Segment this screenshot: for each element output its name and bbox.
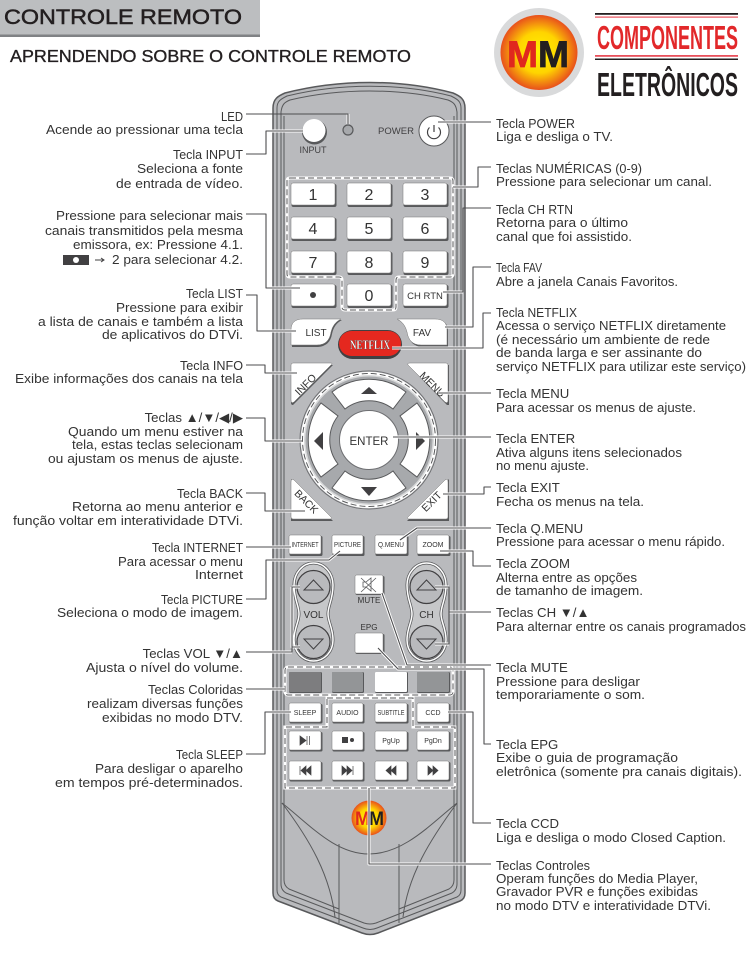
label: ENTER [496, 431, 682, 473]
controls keys group: PgDn [424, 738, 442, 745]
function keys row [289, 535, 450, 556]
function keys row: Q.MENU [378, 542, 404, 549]
controls keys group: CCD [425, 710, 441, 717]
logo: MM badge: M [507, 34, 538, 75]
power button [378, 116, 449, 146]
label: LIST: Pressione para exibir [116, 300, 244, 315]
menu button: MENU [417, 370, 447, 400]
info button [291, 363, 333, 405]
label: POWER: Tecla POWER [496, 116, 575, 131]
label: POWER: Liga e desliga o TV. [496, 129, 613, 144]
label: INPUT [116, 147, 243, 191]
label: INFO [15, 358, 244, 386]
label: VOL [86, 646, 243, 675]
label: CH: Para alternar entre os canais programados [496, 619, 746, 634]
mute button [355, 575, 384, 605]
label: BACK: Tecla BACK [177, 486, 243, 501]
subtitle: APRENDENDO SOBRE O CONTROLE REMOTO [10, 46, 411, 66]
remote body [273, 82, 465, 934]
label: MENU: Para acessar os menus de ajuste. [496, 400, 696, 415]
controls keys group: SLEEP [294, 710, 317, 717]
label: NETFLIX [496, 305, 746, 374]
label: BACK: função voltar em interatividade DTVi. [13, 513, 243, 528]
remote control [273, 82, 465, 934]
label: CH RTN: canal que foi assistido. [496, 229, 632, 244]
label: INPUT: Tecla INPUT [173, 147, 243, 162]
function keys row: PICTURE [334, 542, 361, 549]
exit button: EXIT [420, 489, 445, 514]
label: Q.MENU [496, 521, 725, 549]
label: LIST: de aplicativos do DTVi. [102, 327, 243, 342]
remote mm logo: M [369, 809, 384, 830]
label: INFO: Tecla INFO [180, 358, 243, 373]
label: arrow keys: ou ajustam os menus de ajuste. [48, 451, 243, 466]
label: dot key [45, 208, 244, 267]
label: arrow keys: tela, estas teclas selecionam [72, 437, 243, 452]
info button: INFO [293, 372, 319, 398]
label: LED [46, 109, 244, 137]
label: EPG: eletrônica (somente pra canais digitais). [496, 764, 742, 779]
back button [291, 479, 333, 521]
numeric keypad [287, 178, 453, 310]
colored keys [285, 667, 453, 695]
label: ENTER: Ativa alguns itens selecionados [496, 445, 682, 460]
label: LED: Acende ao pressionar uma tecla [46, 122, 244, 137]
power button: POWER [378, 126, 414, 137]
label: CCD: Liga e desliga o modo Closed Caption. [496, 830, 726, 845]
label: EPG [496, 737, 742, 779]
remote mm logo: M [355, 809, 370, 830]
label: ZOOM [496, 556, 643, 598]
logo: wordmark [595, 13, 738, 103]
label: CH RTN: Tecla CH RTN [496, 202, 573, 217]
label: dot key: 2 para selecionar 4.2. [112, 252, 243, 267]
label: MENU: Tecla MENU [496, 386, 569, 401]
label: CCD [496, 816, 726, 845]
label: NETFLIX: de banda larga e ser assinante do [496, 345, 702, 360]
controls keys group: PgUp [382, 738, 400, 745]
label: ENTER: Tecla ENTER [496, 431, 575, 446]
label: MUTE: temporariamente o som. [496, 687, 645, 702]
d-pad: ENTER [350, 436, 388, 448]
label: numeric keys [496, 161, 712, 189]
label: ENTER: no menu ajuste. [496, 458, 589, 473]
label: SLEEP: Tecla SLEEP [176, 747, 243, 762]
label: EXIT: Tecla EXIT [496, 480, 560, 495]
label: LIST: Tecla LIST [186, 286, 243, 301]
led indicator [343, 125, 353, 135]
numeric keypad: 3 [421, 187, 430, 204]
function keys row: ZOOM [422, 542, 444, 549]
numeric keypad: 9 [421, 255, 430, 272]
label: dot key: Pressione para selecionar mais [56, 208, 243, 223]
numeric keypad: 5 [365, 221, 374, 238]
label: ZOOM: de tamanho de imagem. [496, 583, 643, 598]
channel rocker: CH [419, 610, 434, 621]
label: VOL: Teclas VOL ▼/▲ [143, 646, 243, 661]
label: controls: no modo DTV e interatividade DTVi. [496, 898, 711, 913]
input button [300, 119, 327, 155]
label: BACK [13, 486, 243, 528]
epg button [355, 623, 384, 654]
label: controls: Operam funções do Media Player, [496, 871, 698, 886]
netflix button: NETFLIX [350, 337, 390, 352]
label: LIST [38, 286, 244, 342]
label: FAV: Tecla FAV [496, 260, 542, 275]
label: SLEEP: em tempos pré-determinados. [55, 775, 243, 790]
label: colored keys: Teclas Coloridas [148, 682, 243, 697]
epg button: EPG [361, 623, 377, 632]
label: SLEEP [55, 747, 243, 790]
label: CH RTN [496, 202, 632, 244]
numeric keypad: 8 [365, 255, 374, 272]
label: INTERNET: Internet [195, 567, 243, 582]
label: dot key: canais transmitidos pela mesma [45, 223, 244, 238]
label: INTERNET: Para acessar o menu [118, 554, 243, 569]
label: arrow keys: Teclas ▲/▼/◀/▶ [145, 410, 244, 425]
label: controls [496, 858, 711, 913]
label: INPUT: de entrada de vídeo. [116, 176, 243, 191]
label: LED: LED [221, 109, 243, 124]
title band: CONTROLE REMOTO [4, 5, 242, 29]
label: BACK: Retorna ao menu anterior e [72, 499, 243, 514]
fav button: FAV [413, 328, 431, 339]
mute button: MUTE [358, 596, 380, 605]
label: ZOOM: Tecla ZOOM [496, 556, 570, 571]
label: NETFLIX: serviço NETFLIX para utilizar este serviço) [496, 359, 746, 374]
label: colored keys: exibidas no modo DTV. [102, 710, 243, 725]
label: PICTURE: Tecla PICTURE [161, 592, 243, 607]
numeric keypad: 6 [421, 221, 430, 238]
menu button [408, 363, 449, 405]
label: MUTE: Pressione para desligar [496, 674, 641, 689]
netflix button [338, 330, 402, 359]
label: arrow keys [48, 410, 244, 466]
label: EXIT [496, 480, 644, 509]
label: MUTE [496, 660, 645, 702]
label: controls: Gravador PVR e funções exibidas [496, 884, 698, 899]
label: SLEEP: Para desligar o aparelho [95, 761, 243, 776]
label: POWER [496, 116, 613, 144]
label: arrow keys: Quando um menu estiver na [68, 424, 244, 439]
back button: BACK [292, 488, 320, 516]
label: MUTE: Tecla MUTE [496, 660, 568, 675]
label: NETFLIX: Tecla NETFLIX [496, 305, 577, 320]
channel rocker [407, 563, 446, 661]
label: INFO: Exibe informações dos canais na tela [15, 371, 244, 386]
numeric keypad: 2 [365, 187, 374, 204]
label: Q.MENU: Pressione para acessar o menu rápido. [496, 534, 725, 549]
label: NETFLIX: (é necessário um ambiente de rede [496, 332, 710, 347]
label: NETFLIX: Acessa o serviço NETFLIX diretamente [496, 318, 726, 333]
label: CH RTN: Retorna para o último [496, 215, 628, 230]
controls keys group [285, 698, 455, 788]
label: numeric keys: Pressione para selecionar um canal. [496, 174, 712, 189]
input button: INPUT [300, 145, 327, 155]
title band [0, 0, 260, 37]
volume rocker [294, 563, 333, 661]
label: PICTURE [57, 592, 243, 620]
label: colored keys: realizam diversas funções [87, 696, 243, 711]
controls keys group: SUBTITLE [378, 710, 405, 717]
leader lines [246, 114, 491, 864]
numeric keypad: CH RTN [407, 291, 443, 302]
list button [291, 319, 342, 347]
list button: LIST [305, 328, 327, 339]
volume rocker: VOL [303, 610, 324, 621]
label: colored keys [87, 682, 243, 725]
label: PICTURE: Seleciona o modo de imagem. [57, 605, 243, 620]
remote mm logo [352, 800, 386, 836]
label: CH: Teclas CH ▼/▲ [496, 605, 590, 620]
label: numeric keys: Teclas NUMÉRICAS (0-9) [496, 161, 642, 176]
label: controls: Teclas Controles [496, 858, 590, 873]
label: CCD: Tecla CCD [496, 816, 559, 831]
label: INPUT: Seleciona a fonte [137, 161, 243, 176]
function keys row: INTERNET [292, 542, 319, 549]
label: INTERNET [118, 540, 243, 582]
label: EXIT: Fecha os menus na tela. [496, 494, 644, 509]
logo: MM badge: M [538, 34, 569, 75]
numeric keypad: 4 [309, 221, 318, 238]
label: dot key: emissora, ex: Pressione 4.1. [73, 237, 243, 252]
label: MENU [496, 386, 696, 415]
label: EPG: Tecla EPG [496, 737, 558, 752]
numeric keypad: 0 [365, 288, 374, 305]
label: CH [496, 605, 746, 634]
d-pad [300, 371, 438, 509]
numeric keypad: 7 [309, 255, 318, 272]
exit button [407, 479, 449, 521]
label: LIST: a lista de canais e também a lista [38, 314, 244, 329]
controls keys group: AUDIO [336, 710, 359, 717]
label: Q.MENU: Tecla Q.MENU [496, 521, 583, 536]
logo: MM badge [494, 8, 584, 97]
label: VOL: Ajusta o nível do volume. [86, 660, 243, 675]
label: ZOOM: Alterna entre as opções [496, 570, 637, 585]
numeric keypad: 1 [309, 187, 318, 204]
label: FAV: Abre a janela Canais Favoritos. [496, 274, 678, 289]
fav button [397, 319, 448, 347]
label: EPG: Exibe o guia de programação [496, 750, 678, 765]
label: INTERNET: Tecla INTERNET [152, 540, 243, 555]
label: FAV [496, 260, 678, 289]
